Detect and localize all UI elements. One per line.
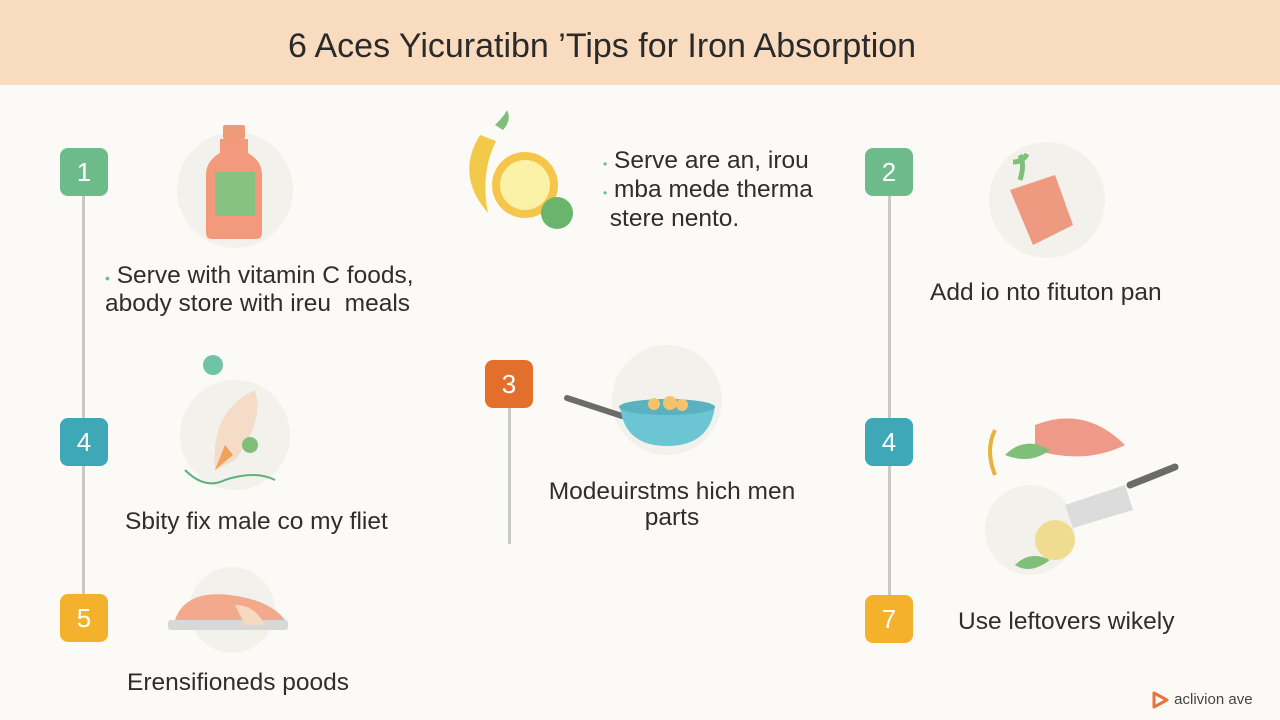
icon: lemon and banana	[469, 110, 573, 229]
badge 5: 5	[77, 602, 91, 632]
icon: fish fillet	[168, 567, 288, 653]
badge 1: 1	[77, 156, 91, 186]
badge 4 left	[60, 418, 108, 466]
badge 7: 7	[882, 604, 896, 634]
text 3: parts	[645, 504, 699, 531]
text 4 left: Sbity fix male co my fliet	[125, 508, 388, 535]
text 3: Modeuirstms hich men	[549, 478, 795, 505]
badge 4 right	[865, 418, 913, 466]
text top center: stere nento.	[610, 205, 739, 232]
badge 1	[60, 148, 108, 196]
title: 6 Aces Yicuratibn ’Tips for Iron Absorption	[288, 27, 916, 65]
text 7: Use leftovers wikely	[958, 608, 1174, 635]
text 5: Erensifioneds poods	[127, 669, 349, 696]
text 1	[105, 262, 414, 317]
badge 3	[485, 360, 533, 408]
icon: pan with steam	[564, 345, 722, 455]
logo icon	[1152, 692, 1169, 709]
logo: aclivion ave	[1174, 691, 1253, 708]
text 1: abody store with ireu meals	[105, 290, 410, 317]
text 3	[549, 478, 795, 531]
text top center: • mba mede therma	[603, 176, 813, 203]
badge 7	[865, 595, 913, 643]
text 2: Add io nto fitutоn pan	[930, 279, 1162, 306]
icon: meat piece	[989, 142, 1105, 258]
badge 5	[60, 594, 108, 642]
text 1: • Serve with vitamin C foods,	[105, 262, 414, 289]
header band	[0, 0, 1280, 85]
badge 2: 2	[882, 156, 896, 186]
text top center: • Serve are an, irou	[603, 147, 809, 174]
icon: bottle	[177, 125, 293, 248]
badge 4 right: 4	[882, 426, 896, 456]
badge 4 left: 4	[77, 426, 91, 456]
text top center	[603, 147, 813, 232]
icon: meat and knife	[985, 418, 1178, 575]
badge 3: 3	[502, 368, 516, 398]
badge 2	[865, 148, 913, 196]
icon: vegetables	[180, 355, 290, 490]
